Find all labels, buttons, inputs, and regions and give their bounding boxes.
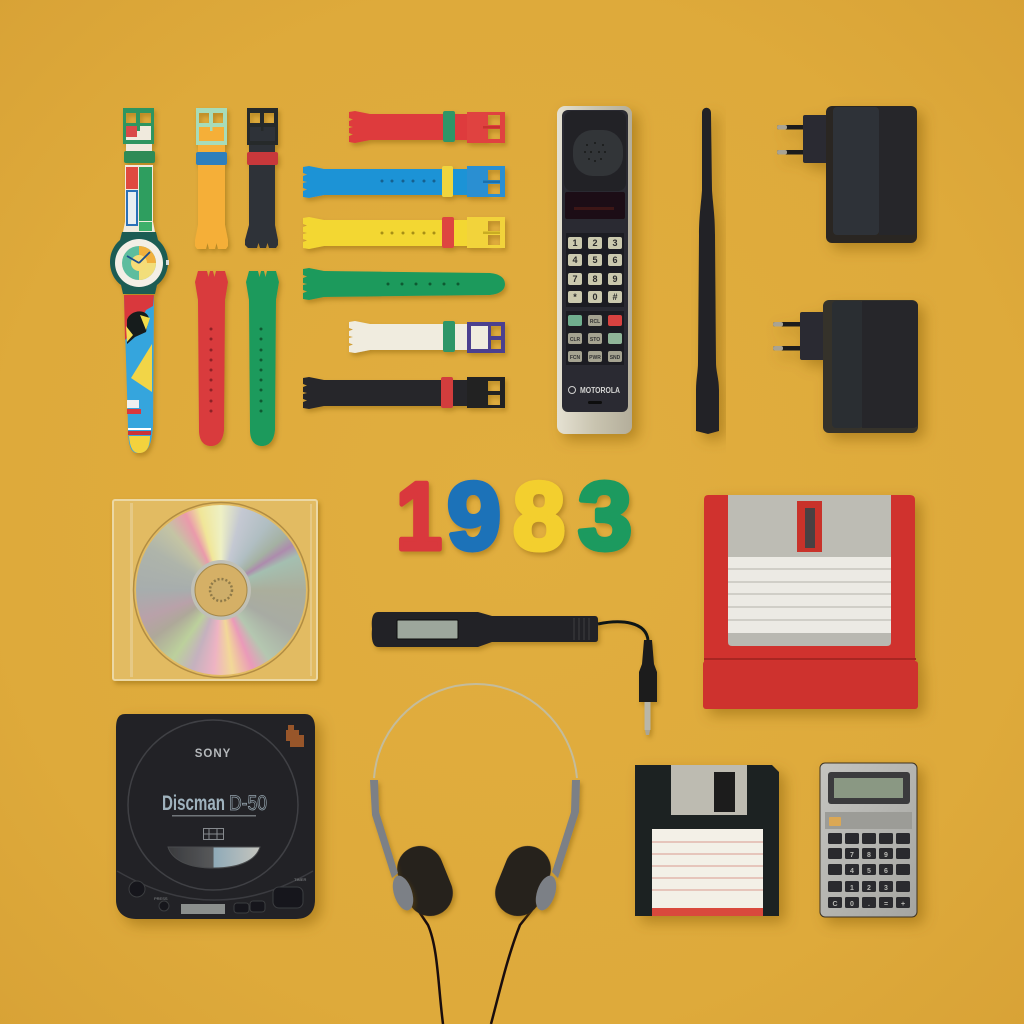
adapter body [823, 300, 918, 433]
player lid [128, 720, 298, 890]
panel: swatch watch [110, 108, 169, 453]
adapter plug [803, 115, 833, 163]
recorder ribs [574, 618, 589, 640]
title: 1983 [396, 463, 632, 570]
disk shutter [671, 765, 747, 815]
yellow strap [303, 217, 505, 249]
panel: brick phone [557, 106, 632, 434]
audio jack [639, 640, 657, 735]
floppy shutter [728, 495, 891, 558]
left ear cup [390, 839, 460, 923]
keypad: 1 [572, 238, 578, 248]
motorola logo [568, 386, 620, 404]
disc window [168, 847, 260, 868]
keypad: 0 [592, 292, 598, 302]
panel: voice recorder with cable [372, 612, 657, 735]
calculator keys: 2 [867, 885, 871, 892]
orange badge [286, 725, 304, 747]
sony logo: SONY [195, 748, 231, 760]
panel: giant red floppy [703, 495, 918, 709]
disk label [652, 829, 763, 916]
phone casing [557, 106, 632, 434]
white strap with purple buckle [349, 321, 505, 353]
keypad: # [612, 292, 618, 302]
keypad: 6 [612, 255, 618, 265]
adapter plug [800, 312, 832, 360]
calculator keys: C [832, 901, 838, 908]
keypad: 8 [592, 274, 598, 284]
orange strap with mint buckle [195, 108, 228, 249]
black strap with red loop [245, 108, 278, 248]
recorder display [397, 620, 458, 639]
adapter pins [773, 322, 802, 350]
player controls: PRESS [154, 896, 168, 901]
display [565, 192, 625, 219]
keypad: 4 [572, 255, 578, 265]
blue strap [303, 166, 505, 198]
calculator body [820, 763, 917, 917]
jewel case [113, 500, 317, 680]
headband [374, 684, 577, 778]
calculator keys: 0 [850, 901, 854, 908]
keypad: CLR [570, 337, 581, 343]
keypad: PWR [589, 355, 601, 361]
keypad: 5 [592, 255, 598, 265]
keypad: 3 [612, 238, 618, 248]
keypad: 9 [612, 274, 618, 284]
calculator keys: 1 [850, 885, 854, 892]
cables [418, 910, 532, 1024]
lower control band [117, 871, 313, 900]
tagline [172, 815, 256, 816]
digit 1: 1 [396, 463, 442, 570]
motorola logo: MOTOROLA [580, 386, 620, 395]
calculator display [828, 772, 910, 804]
icon: antenna [696, 108, 719, 434]
disc hub [191, 560, 251, 620]
earpiece [564, 111, 626, 191]
watch buckle [123, 108, 154, 144]
panel: lower power adapter [773, 300, 918, 433]
keypad: STO [590, 337, 600, 343]
lower strap [124, 295, 154, 453]
phone front [562, 110, 628, 412]
player controls: TIMER [294, 877, 307, 882]
red strap [195, 271, 228, 446]
panel: vertical watch straps [195, 108, 279, 446]
keypad: * [573, 292, 577, 302]
green long strap [303, 268, 505, 300]
panel: horizontal watch straps [303, 111, 505, 409]
calculator keys: 6 [884, 868, 888, 875]
right arm [532, 780, 580, 913]
disc rim [134, 502, 308, 678]
panel: floppy disk [635, 765, 779, 916]
calculator keys: 7 [850, 852, 854, 859]
keypad: 2 [592, 238, 598, 248]
keypad [566, 233, 624, 365]
keypad: 7 [572, 274, 578, 284]
calculator keys: 9 [884, 852, 888, 859]
calculator keys: . [868, 901, 870, 908]
left arm [370, 780, 417, 913]
keypad: RCL [590, 319, 600, 325]
digit 9: 9 [447, 463, 501, 570]
keypad: SND [610, 355, 621, 361]
panel: compact disc in case [113, 500, 317, 680]
upper strap [123, 124, 155, 232]
disk body [635, 765, 779, 916]
floppy label [728, 557, 891, 646]
player body [116, 714, 315, 919]
digit 3: 3 [578, 463, 632, 570]
discman model name: Discman [162, 792, 225, 815]
disc [136, 505, 306, 675]
green strap [246, 271, 279, 446]
recorder body [372, 612, 598, 647]
floppy lower band [703, 658, 918, 709]
calculator keys: 4 [850, 868, 854, 875]
calculator keys: 5 [867, 868, 871, 875]
solar strip [825, 812, 912, 829]
panel: headphones [370, 684, 580, 1024]
panel: upper power adapter [777, 106, 917, 243]
digit 8: 8 [513, 463, 565, 570]
discman model name: D-50 [229, 792, 267, 815]
right ear cup [488, 839, 558, 923]
keypad: FCN [570, 355, 581, 361]
panel: discman player [116, 714, 315, 919]
cd logo [203, 828, 224, 840]
panel: calculator [820, 763, 917, 917]
adapter body [826, 106, 917, 243]
player controls [129, 877, 307, 914]
red strap [349, 111, 505, 143]
black strap with red loop [303, 377, 505, 409]
adapter pins [777, 125, 805, 154]
floppy body [704, 495, 915, 662]
calculator keys: 8 [867, 852, 871, 859]
calculator keys: = [884, 901, 888, 908]
calculator keys: + [901, 901, 905, 908]
watch case and dial [110, 232, 169, 294]
calculator keys [828, 833, 910, 908]
calculator keys: 3 [884, 885, 888, 892]
cable [598, 622, 648, 640]
